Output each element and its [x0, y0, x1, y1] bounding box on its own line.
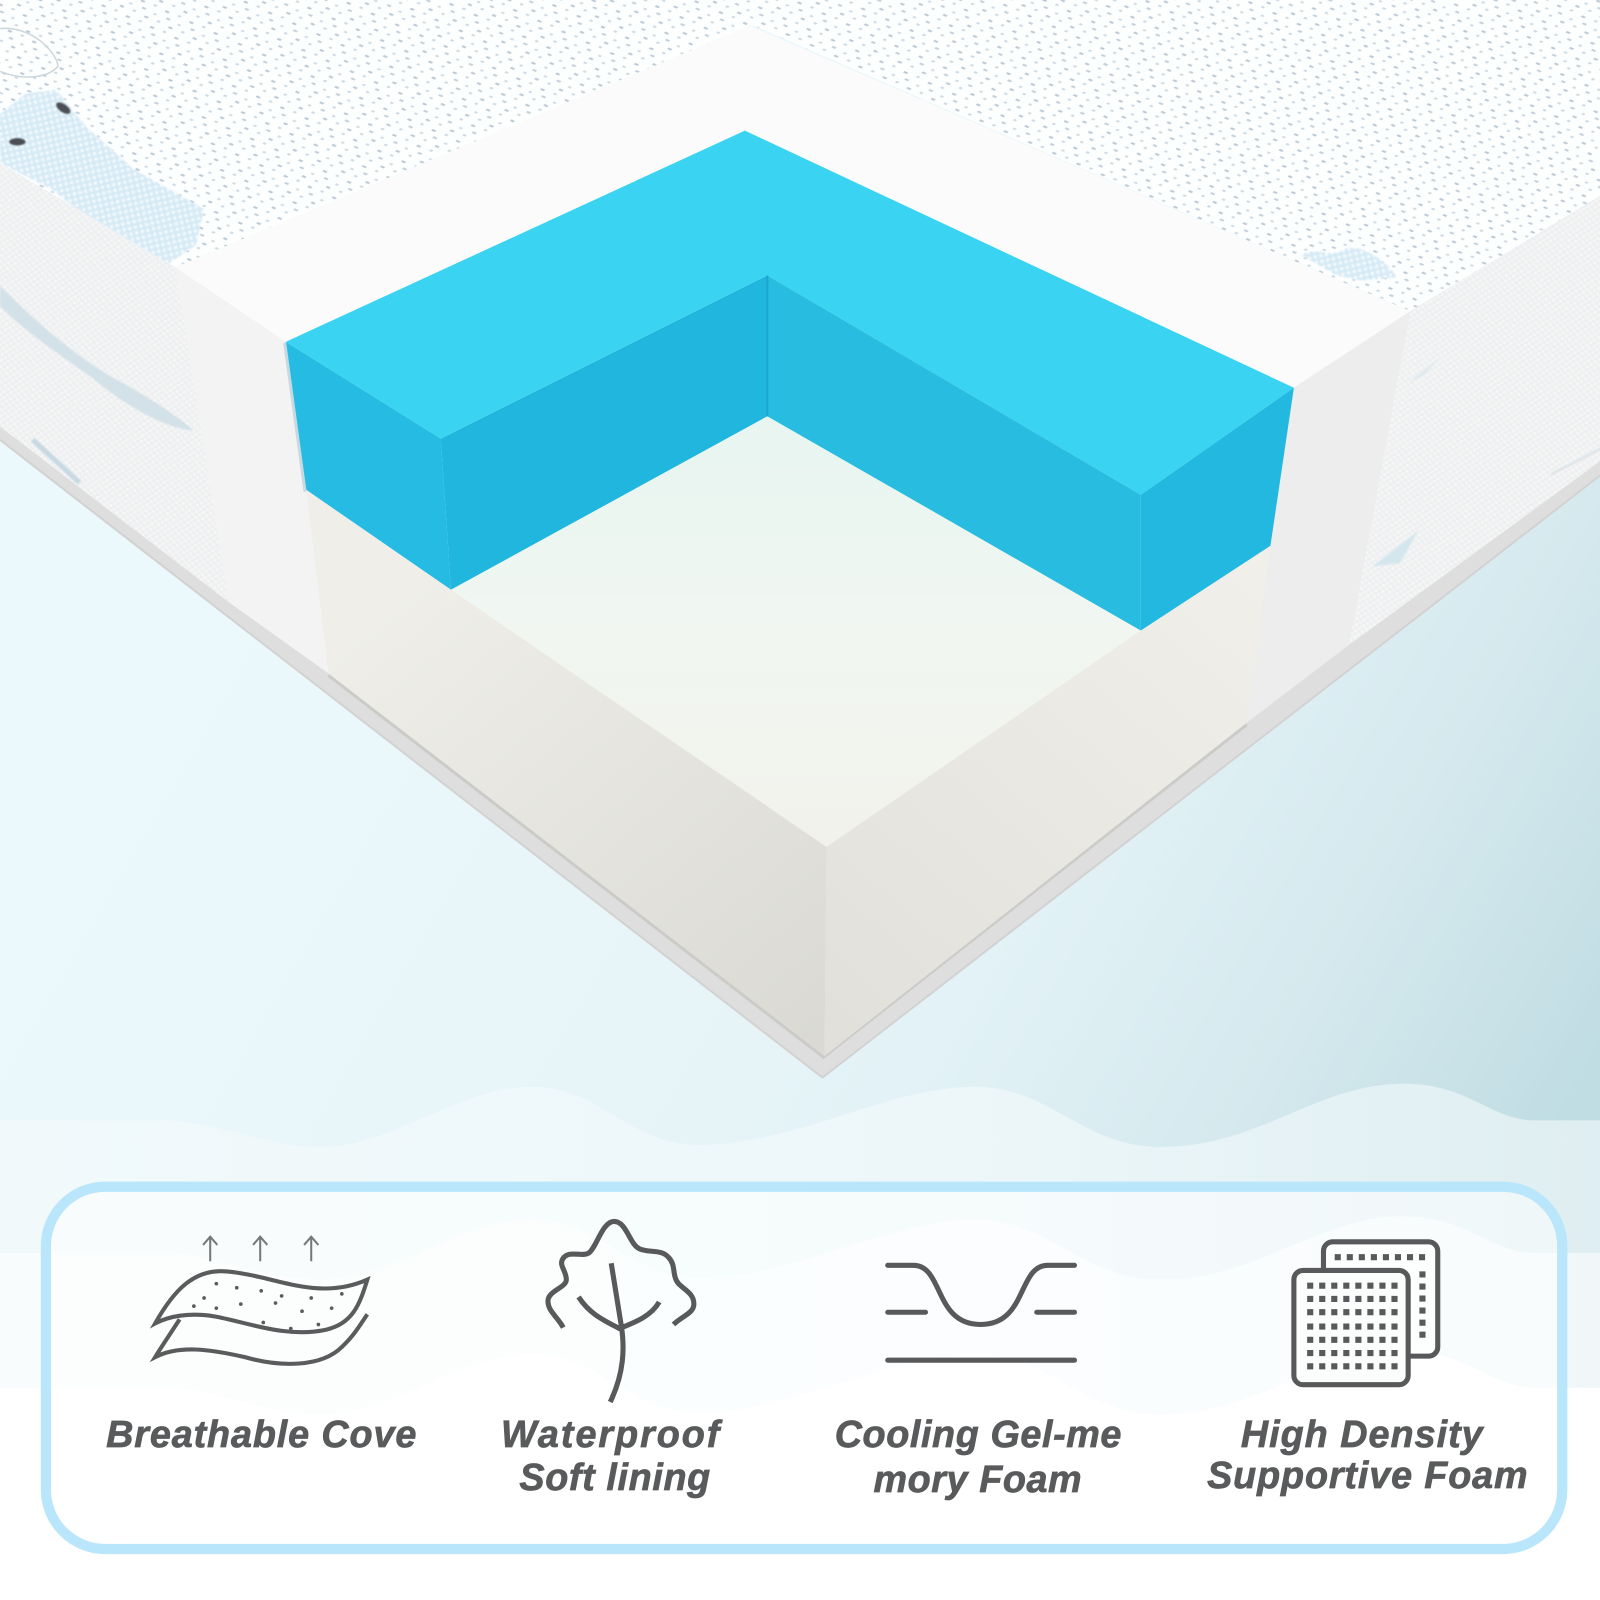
label: High Density Supportive Foam: High Density — [1241, 1413, 1485, 1455]
base board under mattress — [0, 427, 1600, 1078]
label: Waterproof Soft lining: Soft lining — [519, 1456, 710, 1498]
feature: high density supportive foam — [1207, 1242, 1528, 1496]
fabric cover: left side — [0, 163, 229, 602]
label: Cooling Gel-memory Foam: mory Foam — [873, 1458, 1082, 1500]
feature: waterproof lining — [501, 1221, 723, 1498]
label: Cooling Gel-memory Foam: Cooling Gel-me — [835, 1413, 1121, 1455]
background waves — [0, 1084, 1600, 1600]
comfort foam white: top ring — [176, 26, 1410, 388]
label: Breathable Cove: Breathable Cove — [106, 1413, 416, 1455]
fabric cover: right side — [1349, 196, 1600, 645]
high density support foam: cream base — [306, 416, 1270, 1056]
panel frame — [46, 1187, 1562, 1549]
panel: features — [46, 1187, 1562, 1549]
comfort foam white: right face — [1247, 311, 1410, 722]
icon: tree — [548, 1221, 694, 1402]
bear pattern on fabric — [0, 28, 1396, 281]
label: High Density Supportive Foam: Supportive Foam — [1207, 1454, 1528, 1496]
fabric cover: top surface — [0, 0, 1600, 311]
label: Waterproof Soft lining — [501, 1413, 723, 1498]
feature: cooling gel memory foam — [835, 1265, 1121, 1500]
mattress cutaway illustration — [0, 0, 1600, 1078]
label: High Density Supportive Foam — [1207, 1413, 1528, 1496]
label: Waterproof Soft lining: Waterproof — [501, 1413, 723, 1455]
icon: fabric layers with rising arrows — [155, 1237, 367, 1364]
cooling gel memory foam: blue layer — [285, 131, 1294, 631]
label: Cooling Gel-memory Foam — [835, 1413, 1121, 1500]
icon: foam compression curve — [888, 1265, 1074, 1360]
comfort foam white: left face — [176, 267, 329, 673]
feature: breathable cover — [106, 1237, 416, 1455]
icon: density sheets — [1294, 1242, 1438, 1385]
